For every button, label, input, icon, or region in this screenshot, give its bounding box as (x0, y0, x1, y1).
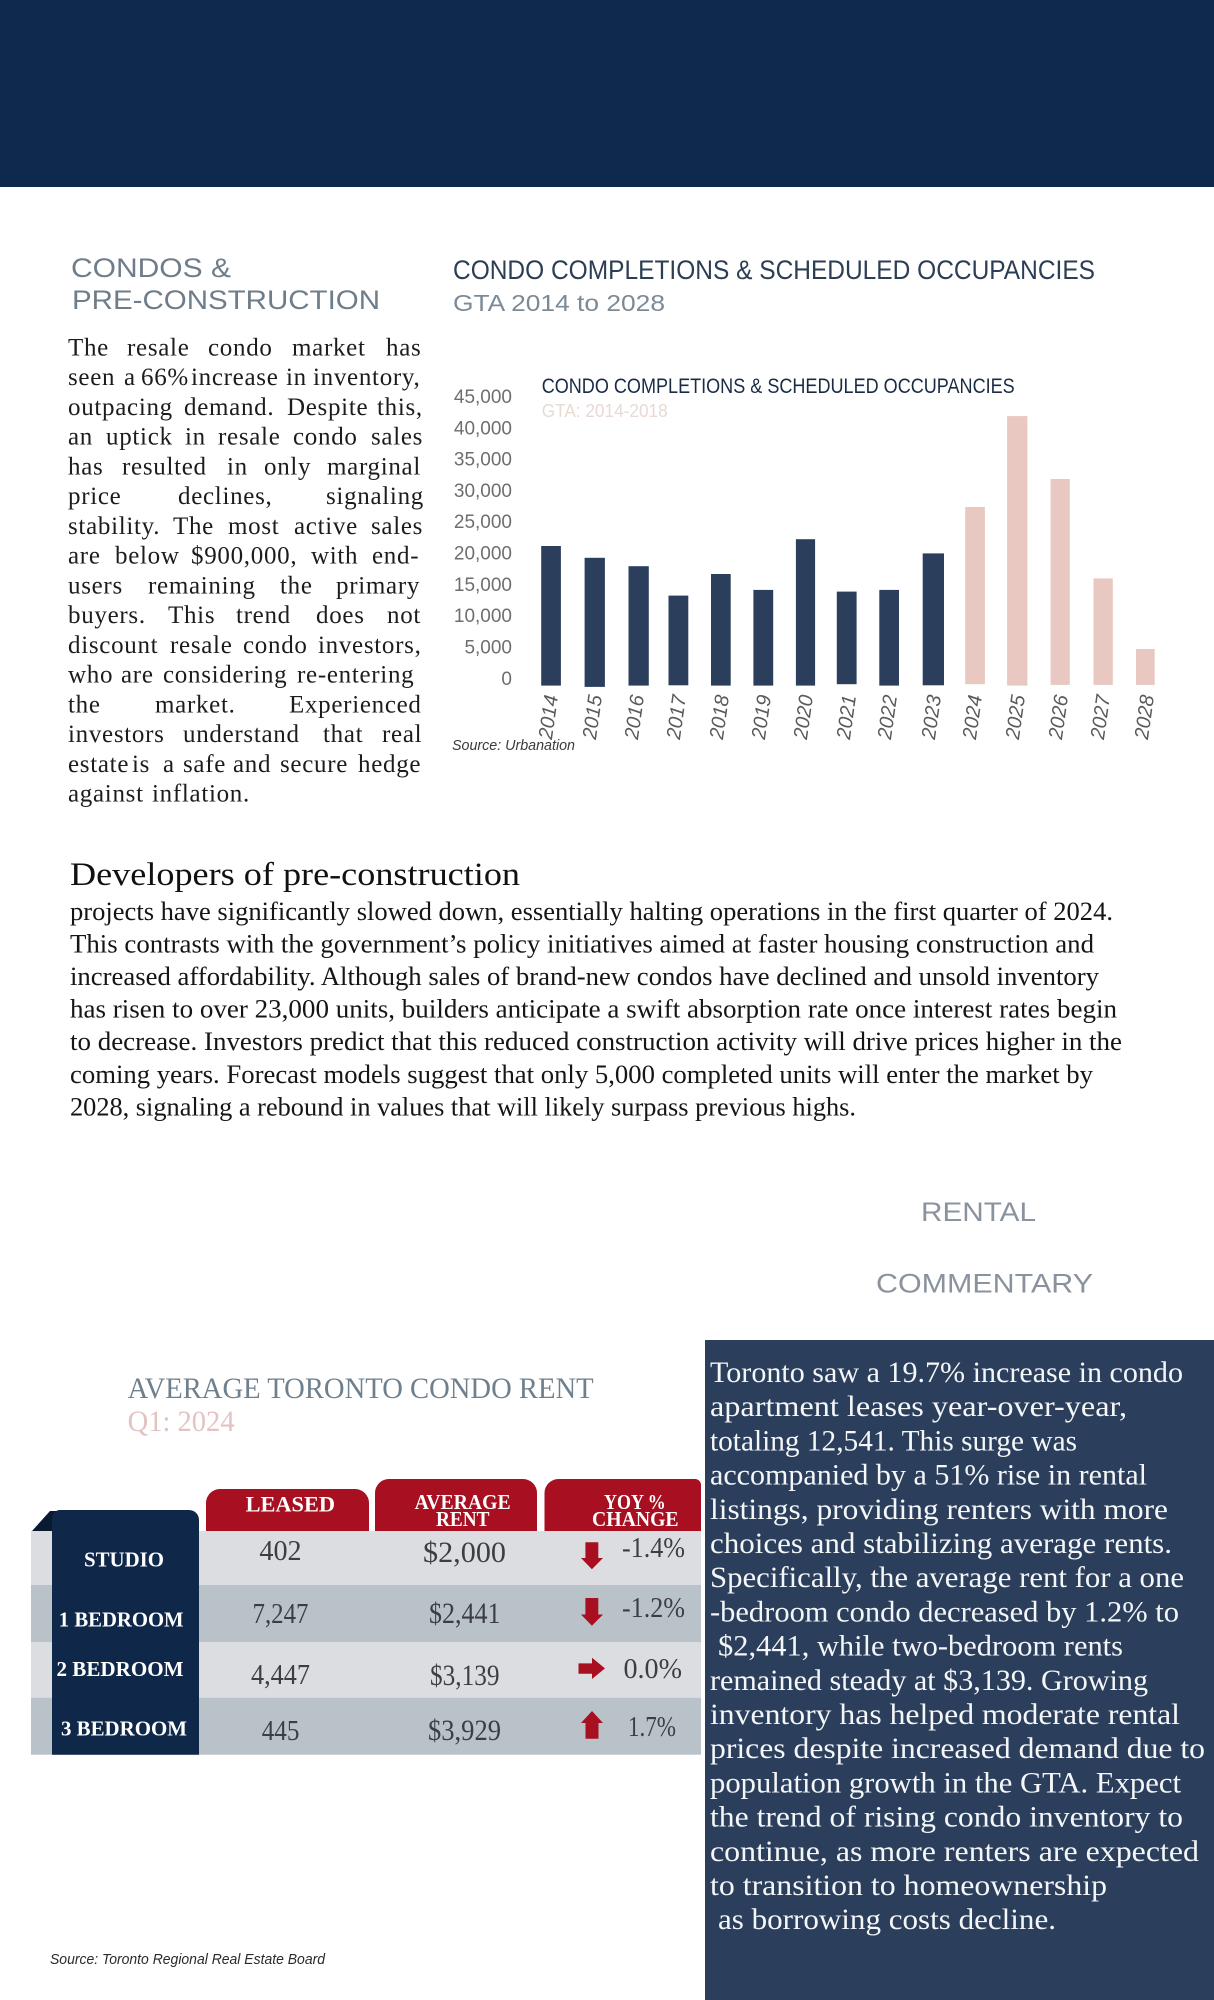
text block: resale condo market: considering (163, 662, 287, 689)
text block: resale condo market (68, 334, 424, 808)
average rent values: $3,139 (430, 1659, 500, 1692)
text block: rental commentary: -bedroom condo decreased by 1.2% to (710, 1595, 1179, 1628)
text block: resale condo market: this, (377, 394, 423, 421)
icon: down arrow studio (581, 1542, 603, 1569)
text block: resale condo market: stability. (68, 513, 160, 540)
text block: resale condo market: with (311, 543, 358, 570)
y axis labels: 10,000 (454, 606, 512, 627)
text block: resale condo market: primary (336, 572, 420, 599)
y axis labels: 0 (501, 669, 512, 690)
heading: average toronto condo rent: AVERAGE TORONTO CONDO RENT (128, 1372, 594, 1405)
leased values: 4,447 (251, 1660, 310, 1691)
text block: developers paragraph (70, 897, 1122, 1122)
text block: rental commentary: prices despite increased demand due to (710, 1732, 1205, 1765)
text block: rental commentary: Toronto saw a 19.7% increase in condo (710, 1356, 1183, 1389)
text block: resale condo market: outpacing (68, 394, 173, 421)
chart source: Source: Urbanation (452, 737, 575, 754)
year labels: 2020 (790, 694, 818, 742)
text block: resale condo market: active (294, 513, 358, 540)
year labels: 2014 (535, 694, 563, 742)
text block: resale condo market: a (163, 751, 175, 778)
y axis labels: 45,000 (454, 387, 512, 408)
text block: rental commentary (710, 1356, 1205, 1936)
text block: resale condo market: discount (68, 632, 158, 659)
text block: developers paragraph: This contrasts with the government’s policy initiatives aimed at faster housing construction and (70, 930, 1094, 958)
unit type ribbon (52, 1510, 199, 1755)
leased values (251, 1536, 310, 1747)
text block: resale condo market: who (68, 662, 113, 689)
text block: resale condo market: re-entering (297, 662, 414, 689)
text block: resale condo market: in (286, 364, 307, 391)
column header labels: LEASED (246, 1492, 335, 1517)
year over year values: 1.7% (628, 1712, 676, 1743)
text block: resale condo market: the (68, 691, 101, 718)
column header labels: YOY % (604, 1490, 666, 1514)
section heading: condos and pre-construction: CONDOS & (71, 253, 231, 283)
text block: resale condo market: $900,000, (191, 543, 297, 570)
text block: resale condo market: most (228, 513, 279, 540)
table rows (31, 1531, 701, 1755)
text block: resale condo market: does (316, 602, 365, 629)
heading: average toronto condo rent: Q1: 2024 (128, 1405, 235, 1438)
text block: developers paragraph: increased affordability. Although sales of brand-new condos have declined and unsold inventory (70, 962, 1099, 991)
chart heading: GTA 2014 to 2028 (453, 290, 665, 316)
column header labels: CHANGE (592, 1507, 679, 1531)
scheduled bars 2024 to 2028 (965, 416, 1155, 686)
text block: resale condo market: marginal (327, 453, 421, 480)
year labels: 2016 (621, 693, 649, 742)
chart inner title: CONDO COMPLETIONS & SCHEDULED OCCUPANCIES (542, 375, 1015, 398)
text block: developers paragraph: to decrease. Investors predict that this reduced construction activity will drive prices higher in the (70, 1027, 1122, 1056)
text block: resale condo market: market (292, 334, 366, 361)
text block: resale condo market: and (233, 751, 271, 778)
text block: resale condo market: demand. (184, 394, 274, 421)
heading: average toronto condo rent (128, 1372, 594, 1438)
text block: rental commentary: $2,441, while two-bedroom rents (718, 1630, 1123, 1663)
text block: rental commentary: the trend of rising condo inventory to (710, 1801, 1183, 1834)
text block: resale condo market: condo (208, 334, 273, 361)
icon: up arrow three bedroom (581, 1711, 603, 1739)
text block: resale condo market: in (227, 453, 248, 480)
y axis labels: 35,000 (454, 450, 512, 471)
chart heading: CONDO COMPLETIONS & SCHEDULED OCCUPANCIES (453, 255, 1095, 285)
text block: resale condo market: real (382, 721, 422, 748)
text block: resale condo market: against (68, 781, 144, 808)
text block: resale condo market: signaling (326, 483, 424, 510)
average rent values: $2,000 (423, 1536, 506, 1569)
text block: resale condo market: resale (170, 632, 232, 659)
column header labels (246, 1490, 679, 1531)
y axis labels: 15,000 (454, 575, 512, 596)
text block: resale condo market: 66% (141, 364, 189, 391)
completed bars 2014 to 2023 (541, 539, 944, 687)
text block: resale condo market: resale (218, 424, 280, 451)
heading: developers of pre-construction: Developers of pre-construction (70, 857, 520, 893)
y axis labels: 20,000 (454, 544, 512, 564)
year over year values: 0.0% (624, 1654, 682, 1685)
text block: rental commentary: totaling 12,541. This surge was (710, 1424, 1077, 1457)
unit type labels: 1 BEDROOM (59, 1608, 184, 1632)
unit type labels: STUDIO (84, 1548, 164, 1572)
table: average rent by unit type (31, 1479, 701, 1755)
text block: resale condo market: trend (236, 602, 291, 629)
year over year values (622, 1533, 685, 1743)
text block: resale condo market: secure (280, 751, 348, 778)
text block: resale condo market: seen (68, 364, 115, 391)
text block: resale condo market: hedge (358, 751, 421, 778)
year over year values: -1.2% (622, 1593, 685, 1624)
ribbon fold (32, 1511, 56, 1531)
y axis labels: 30,000 (454, 481, 512, 502)
text block: rental commentary: to transition to homeownership (710, 1869, 1107, 1902)
text block: developers paragraph: 2028, signaling a rebound in values that will likely surpass previous highs. (70, 1092, 856, 1122)
text block: resale condo market: increase (191, 364, 278, 391)
panel: rental commentary (705, 1340, 1214, 2000)
text block: resale condo market: in (185, 424, 206, 451)
section heading: condos and pre-construction: PRE-CONSTRUCTION (72, 285, 380, 315)
text block: resale condo market: The (173, 513, 214, 540)
year labels: 2028 (1131, 694, 1159, 742)
average rent values: $2,441 (429, 1597, 500, 1630)
text block: resale condo market: sales (371, 513, 423, 540)
text block: rental commentary: remained steady at $3,139. Growing (710, 1664, 1148, 1697)
text block: resale condo market: remaining (148, 572, 256, 599)
heading: rental commentary: RENTAL (921, 1197, 1036, 1227)
year labels: 2025 (1002, 693, 1030, 742)
text block: rental commentary: continue, as more renters are expected (710, 1835, 1199, 1868)
column header labels: RENT (436, 1507, 490, 1531)
text block: resale condo market: users (68, 572, 123, 599)
year labels: 2018 (706, 694, 734, 742)
text block: resale condo market: condo (243, 632, 308, 659)
text block: resale condo market: condo (293, 424, 358, 451)
leased values: 7,247 (252, 1599, 308, 1630)
text block: resale condo market: not (387, 602, 421, 629)
text block: rental commentary: inventory has helped moderate rental (710, 1698, 1180, 1731)
unit type labels: 2 BEDROOM (56, 1657, 184, 1681)
text block: rental commentary: accompanied by a 51% rise in rental (710, 1459, 1147, 1492)
text block: rental commentary: population growth in the GTA. Expect (710, 1766, 1182, 1799)
text block: resale condo market: uptick (106, 424, 173, 451)
column header tabs (206, 1479, 701, 1531)
table source: Source: Toronto Regional Real Estate Board (50, 1951, 326, 1968)
bar chart: completions and occupancies (454, 375, 1159, 742)
column header labels: AVERAGE (415, 1490, 511, 1514)
text block: resale condo market: inventory, (313, 364, 420, 391)
heading: rental commentary: COMMENTARY (876, 1269, 1093, 1299)
year labels: 2021 (833, 694, 861, 742)
y axis labels: 5,000 (464, 637, 512, 658)
text block: resale condo market: estate (68, 751, 129, 778)
heading: rental commentary (876, 1197, 1093, 1299)
leased values: 402 (259, 1536, 302, 1567)
unit type labels (56, 1548, 187, 1741)
text block: resale condo market: safe (183, 751, 226, 778)
text block: rental commentary: as borrowing costs decline. (718, 1903, 1056, 1936)
year labels: 2015 (579, 693, 607, 742)
text block: rental commentary: choices and stabilizing average rents. (710, 1527, 1172, 1560)
y axis labels: 40,000 (454, 418, 512, 439)
text block: resale condo market: resale (127, 334, 190, 361)
text block: resale condo market: are (68, 543, 101, 570)
text block: resale condo market: has (386, 334, 421, 361)
text block: resale condo market: market. (155, 691, 236, 718)
text block: resale condo market: Experienced (289, 691, 422, 718)
text block: resale condo market: an (68, 424, 93, 451)
year labels: 2023 (918, 694, 946, 742)
text block: resale condo market: that (323, 721, 363, 748)
year labels: 2022 (874, 694, 902, 742)
text block: resale condo market: Despite (287, 394, 368, 421)
text block: resale condo market: end- (372, 543, 419, 570)
unit type labels: 3 BEDROOM (61, 1717, 187, 1741)
text block: resale condo market: sales (371, 424, 423, 451)
year labels: 2017 (663, 693, 691, 742)
icon: right arrow two bedroom (578, 1658, 605, 1679)
year labels: 2019 (748, 694, 776, 742)
year labels (535, 693, 1159, 742)
text block: resale condo market: resulted (122, 453, 207, 480)
text block: resale condo market: are (121, 662, 154, 689)
text block: developers paragraph: has risen to over 23,000 units, builders anticipate a swift absorption rate once interest rates begin (70, 994, 1117, 1024)
text block: resale condo market: is (132, 751, 150, 778)
text block: resale condo market: price (68, 483, 121, 510)
text block: resale condo market: investors, (318, 632, 422, 659)
text block: resale condo market: declines, (178, 483, 272, 510)
text block: rental commentary: Specifically, the average rent for a one (710, 1561, 1184, 1594)
text block: developers paragraph: coming years. Forecast models suggest that only 5,000 completed units will enter the market by (70, 1060, 1093, 1089)
text block: resale condo market: The (68, 334, 109, 361)
text block: resale condo market: a (124, 364, 136, 391)
year over year values: -1.4% (622, 1533, 685, 1564)
text block: resale condo market: investors (68, 721, 165, 748)
y axis labels: 25,000 (454, 512, 512, 533)
text block: resale condo market: the (280, 572, 313, 599)
text block: resale condo market: has (68, 453, 103, 480)
chart inner title (542, 375, 1015, 421)
average rent values: $3,929 (428, 1714, 501, 1747)
leased values: 445 (262, 1716, 299, 1747)
text block: resale condo market: This (168, 602, 215, 629)
text block: resale condo market: below (115, 543, 180, 570)
section heading: condos and pre-construction (71, 253, 380, 315)
chart heading (453, 255, 1095, 316)
text block: resale condo market: understand (183, 721, 300, 748)
year labels: 2026 (1045, 693, 1073, 742)
text block: resale condo market: only (264, 453, 311, 480)
text block: resale condo market: inflation. (152, 781, 250, 808)
text block: developers paragraph: projects have significantly slowed down, essentially halting operations in the first quarter of 2024. (70, 897, 1113, 926)
year labels: 2024 (959, 694, 987, 742)
header band (0, 0, 1214, 187)
year labels: 2027 (1087, 693, 1115, 742)
y axis labels (454, 387, 512, 690)
chart inner title: GTA: 2014-2018 (542, 401, 668, 421)
text block: resale condo market: buyers. (68, 602, 146, 629)
text block: rental commentary: listings, providing renters with more (710, 1493, 1168, 1526)
average rent values (423, 1536, 506, 1747)
text block: rental commentary: apartment leases year-over-year, (710, 1390, 1127, 1423)
icon: down arrow one bedroom (581, 1598, 603, 1626)
